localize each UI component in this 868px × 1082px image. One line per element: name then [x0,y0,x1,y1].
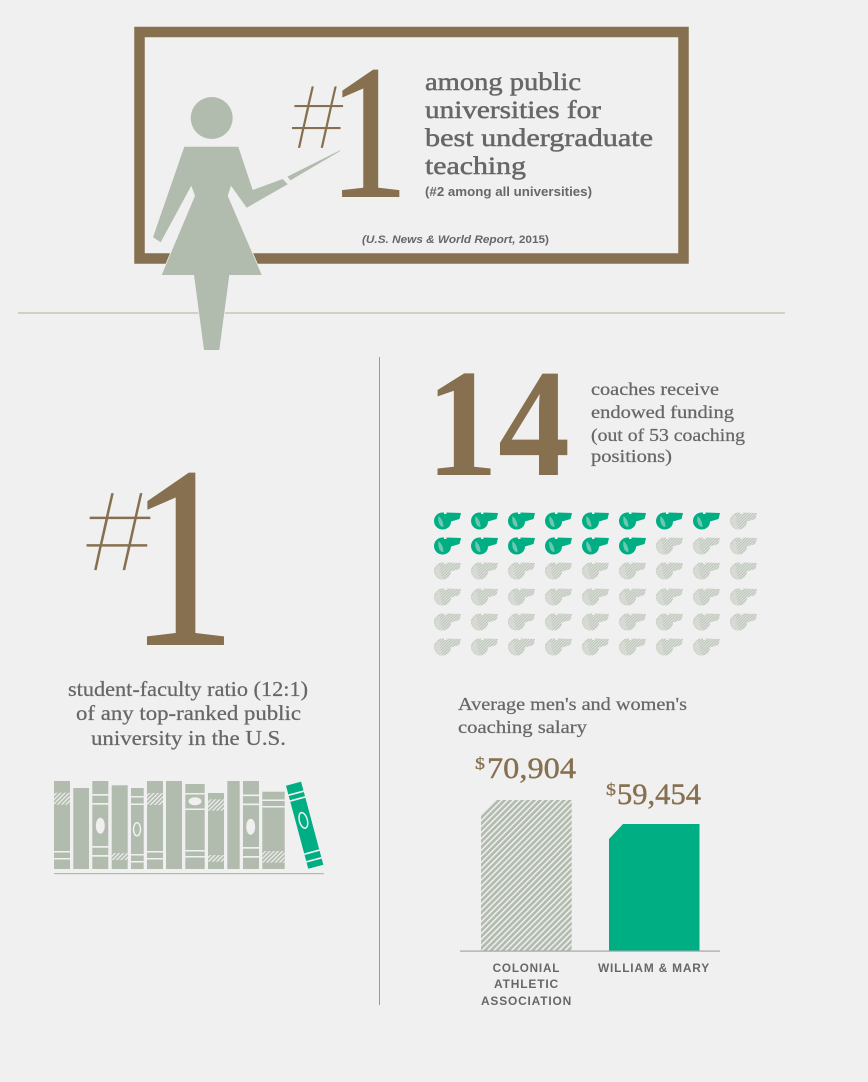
value: $59,454: $ [606,780,616,799]
text block: student-faculty ratio [68,677,308,750]
chart heading: average coaching salary: Average men's and women's [458,694,687,714]
text block: student-faculty ratio: university in the U.S. [91,726,286,750]
text block: teaching ranking description [425,69,653,199]
text block: endowed funding: positions) [591,446,672,467]
text block: endowed funding: (out of 53 coaching [591,425,745,446]
heading: number one teaching rank [290,28,408,238]
label: Colonial Athletic Association [481,963,572,1008]
text block: endowed funding: coaches receive [591,379,719,399]
heading: number one student-faculty ratio [84,414,236,700]
label: Colonial Athletic Association: ATHLETIC [494,979,559,991]
text block: teaching ranking description: best undergraduate [425,125,653,152]
icon: bookshelf [54,781,324,874]
bar: Colonial Athletic Association [481,800,572,951]
divider between columns [379,357,380,1005]
label: Colonial Athletic Association: ASSOCIATION [481,996,572,1008]
text block: teaching ranking description: teaching [425,153,527,180]
bar: William & Mary [609,824,700,951]
chart heading: average coaching salary: coaching salary [458,717,587,737]
panel: teaching ranking chalkboard frame [140,32,684,258]
heading: 14 coaches: 14 [426,339,570,509]
text block: teaching ranking description: among public [425,69,581,96]
value: $59,454: 59,454 [617,778,701,811]
text block: student-faculty ratio: of any top-ranked public [76,701,301,725]
heading: number one student-faculty ratio: # [84,466,153,598]
text block: student-faculty ratio: student-faculty ratio (12:1) [68,677,308,701]
source note: (U.S. News & World Report, 2015) [362,234,549,246]
label: Colonial Athletic Association: COLONIAL [493,963,560,975]
value: $70,904: 70,904 [487,752,576,785]
chart heading: average coaching salary [458,694,687,737]
label: William & Mary: WILLIAM & MARY [598,963,710,975]
heading: number one student-faculty ratio: 1 [129,414,236,700]
bar chart: coaching salaries [460,752,720,1008]
heading: number one teaching rank: # [290,64,345,169]
text block: endowed funding: endowed funding [591,402,734,422]
text block: teaching ranking description: (#2 among all universities) [425,185,592,199]
icon: teacher figure with pointer [153,97,340,350]
text block: teaching ranking description: universities for [425,97,602,124]
axis [460,950,720,952]
value: $70,904: $ [475,754,485,773]
icon array: 53 whistles, 14 highlighted [434,512,757,656]
text block: endowed funding [591,379,745,467]
floor line [18,312,785,314]
heading: number one teaching rank: 1 [329,28,408,238]
